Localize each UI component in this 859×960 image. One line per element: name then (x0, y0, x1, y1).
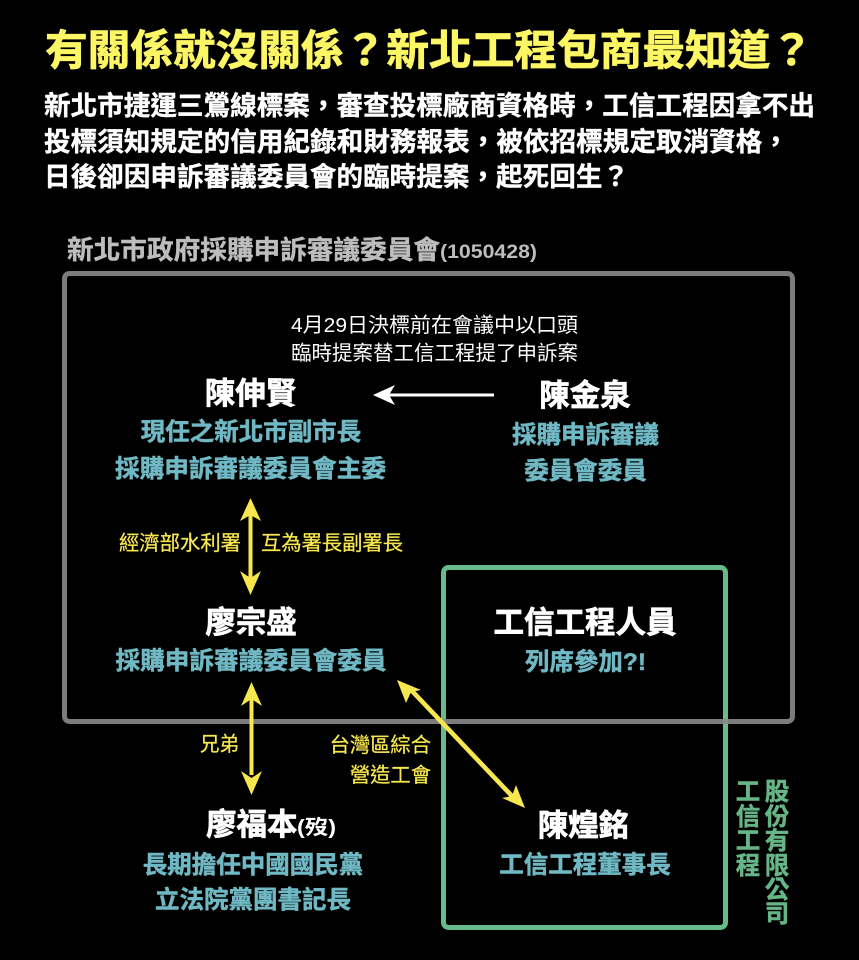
role: 廖福本: 立法院黨團書記長 (155, 886, 351, 914)
person: 陳金泉: 採購申訴審議 (512, 421, 659, 449)
proposal note (291, 314, 578, 365)
arrow: white left arrow (373, 385, 494, 405)
person: 陳金泉: 委員會委員 (524, 457, 647, 485)
company name: 公 (765, 876, 790, 904)
person: 工信工程人員 (494, 606, 676, 676)
label: water bureau relation (119, 532, 403, 555)
arrow: 廖宗盛 to 陳煌銘 (397, 680, 525, 808)
arrow: 陳伸賢 to 廖宗盛 (240, 498, 261, 595)
company name: 司 (765, 901, 789, 928)
person: 廖宗盛: 廖宗盛 (205, 606, 297, 640)
company name: 限 (765, 853, 789, 880)
proposal note: 臨時提案替工信工程提了申訴案 (291, 342, 578, 365)
company name: 份 (765, 803, 789, 831)
role: 廖福本 (143, 851, 363, 914)
company name: 信 (736, 803, 760, 831)
company name: 股 (765, 779, 789, 806)
committee heading: 新北市政府採購申訴審議委員會 (67, 235, 440, 265)
person: 工信工程人員: 列席參加?! (525, 648, 646, 676)
person: 陳伸賢 (115, 377, 387, 483)
label: water bureau relation: 經濟部水利署 (119, 532, 241, 555)
person: 廖宗盛: 採購申訴審議委員會委員 (116, 647, 386, 675)
label: construction union: 台灣區綜合 (330, 734, 431, 757)
company name: 工 (736, 779, 760, 806)
label: construction union (330, 734, 431, 787)
person: 工信工程人員: 工信工程人員 (494, 606, 676, 640)
label: construction union: 營造工會 (350, 764, 431, 787)
title: 有關係就沒關係？新北工程包商最知道？ (45, 17, 813, 78)
person: 廖宗盛 (116, 606, 386, 675)
intro paragraph: 日後卻因申訴審議委員會的臨時提案，起死回生？ (44, 155, 629, 194)
company name: 工 (736, 828, 760, 855)
company name: 有 (765, 827, 789, 855)
person: 陳煌銘: 陳煌銘 (538, 809, 629, 843)
person: 陳伸賢: 陳伸賢 (205, 377, 296, 411)
company name (736, 779, 790, 928)
role: 廖福本: 長期擔任中國國民黨 (143, 851, 363, 879)
arrow: 廖宗盛 to 廖福本 (241, 682, 262, 795)
label: water bureau relation: 互為署長副署長 (261, 532, 403, 555)
intro paragraph: 投標須知規定的信用紀錄和財務報表，被依招標規定取消資格， (44, 120, 789, 159)
person: 陳煌銘: 工信工程董事長 (499, 851, 671, 879)
person: 陳伸賢: 採購申訴審議委員會主委 (115, 455, 387, 483)
proposal note: 4月29日決標前在會議中以口頭 (291, 314, 578, 337)
person: 陳金泉: 陳金泉 (539, 379, 631, 413)
person: 陳金泉 (512, 379, 659, 485)
company name: 程 (736, 852, 760, 880)
committee heading: (1050428) (440, 242, 537, 263)
person: 廖福本: (歿) (297, 816, 336, 839)
intro paragraph: 新北市捷運三鶯線標案，審查投標廠商資格時，工信工程因拿不出 (44, 84, 815, 123)
person: 陳煌銘 (499, 809, 671, 879)
intro paragraph (44, 84, 815, 194)
person: 廖福本: 廖福本 (206, 808, 298, 842)
label: brothers: 兄弟 (200, 733, 239, 756)
person: 陳伸賢: 現任之新北市副市長 (141, 417, 361, 446)
panel: committee box (64, 274, 792, 722)
panel: company box (444, 568, 726, 928)
